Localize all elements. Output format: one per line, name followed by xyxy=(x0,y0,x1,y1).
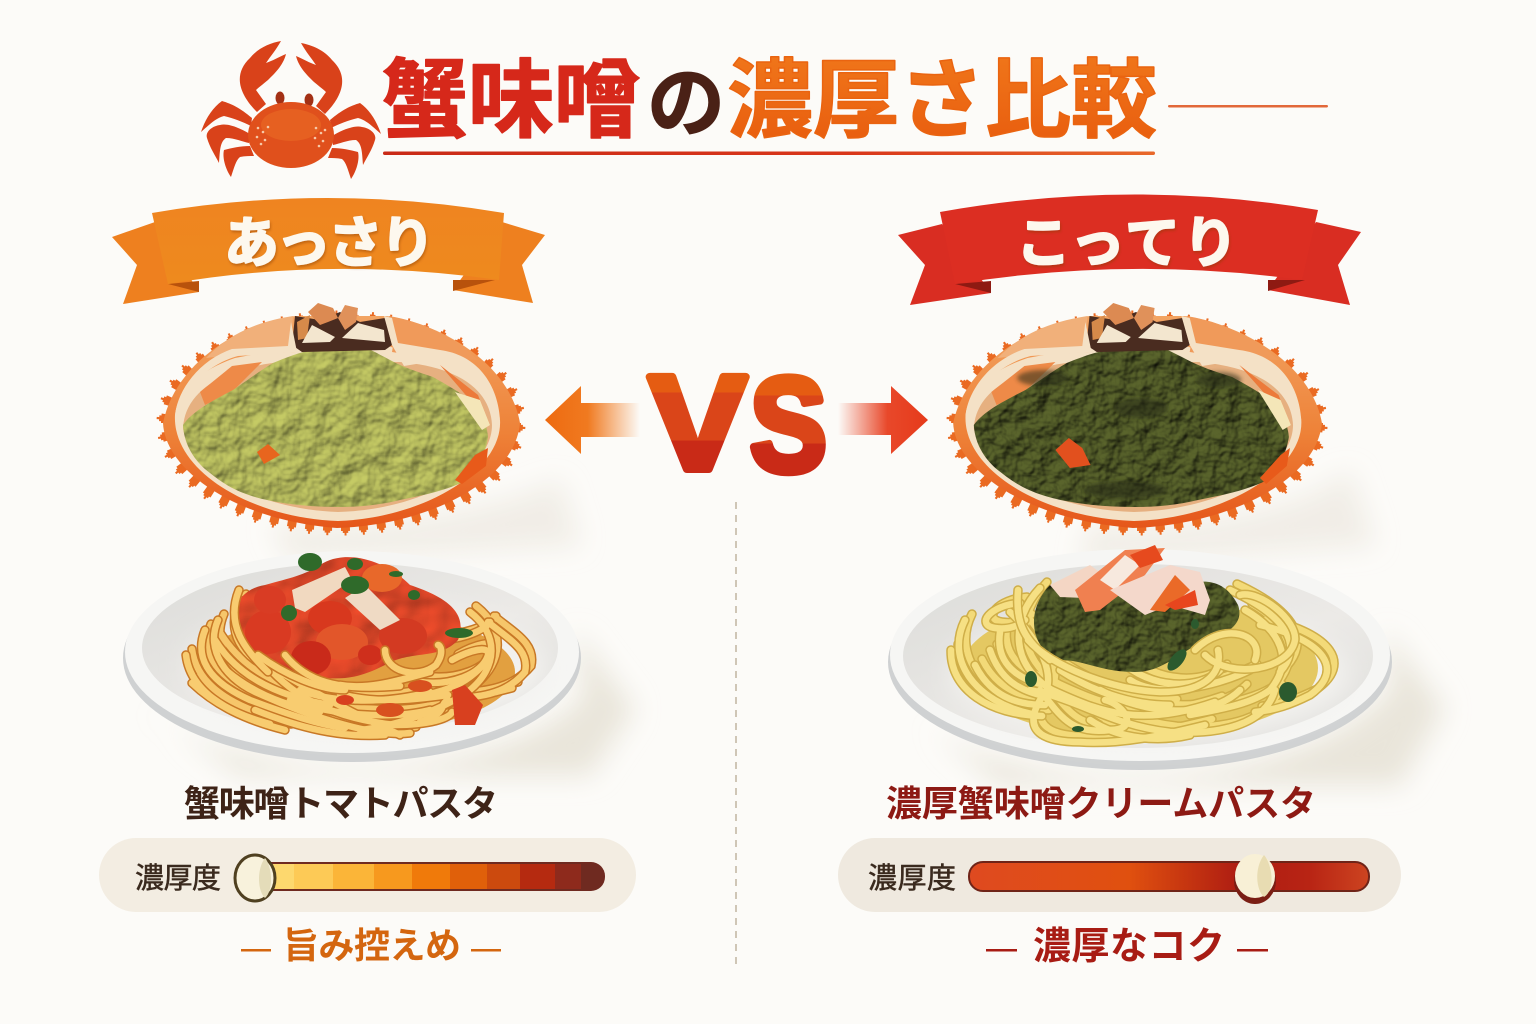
title: 濃厚さ比較: 濃厚さ比較 xyxy=(727,53,1157,149)
plate: cream pasta xyxy=(888,545,1392,770)
herbs xyxy=(1025,619,1297,732)
parsley xyxy=(281,553,473,638)
meter knob xyxy=(1234,854,1276,904)
dish name: cream: 濃厚蟹味噌クリームパスタ xyxy=(886,783,1316,824)
rich sauce xyxy=(1034,582,1239,672)
pasta base xyxy=(962,598,1318,738)
shadow washes xyxy=(920,470,1445,785)
front strands xyxy=(234,590,441,690)
meter bar xyxy=(969,862,1369,891)
front strands xyxy=(1017,590,1295,692)
pasta strands xyxy=(186,594,532,736)
meter bar xyxy=(254,862,605,891)
tomato sauce xyxy=(234,557,461,679)
ribbon label: こってり xyxy=(1016,212,1238,274)
dark miso xyxy=(974,340,1289,507)
pasta strands xyxy=(951,582,1334,743)
ribbon: あっさり xyxy=(112,198,545,304)
panel: light (あっさり) xyxy=(99,198,636,966)
richness meter: light xyxy=(99,838,636,912)
caption: light: 旨み控えめ xyxy=(283,925,461,966)
vs text xyxy=(649,348,827,500)
crab meat chunks xyxy=(292,567,352,612)
title underline xyxy=(383,152,1155,155)
arrow: right xyxy=(838,386,928,454)
richness meter: rich xyxy=(838,838,1401,912)
crab shell with light miso xyxy=(163,303,520,528)
title side line xyxy=(1168,105,1328,108)
dish name: tomato: 蟹味噌トマトパスタ xyxy=(184,783,498,824)
crab meat topping xyxy=(1050,545,1210,615)
panel: rich (こってり) xyxy=(838,194,1445,968)
light miso xyxy=(183,340,488,507)
title: の: の xyxy=(647,59,725,147)
centre divider xyxy=(735,502,737,970)
miso shadows xyxy=(1017,370,1241,499)
title: 蟹味噌: 蟹味噌 xyxy=(382,53,640,149)
plate: tomato pasta xyxy=(123,551,581,762)
arrow: left xyxy=(545,386,640,454)
pasta base xyxy=(195,612,515,732)
shadow washes xyxy=(150,480,635,775)
ribbon label: あっさり xyxy=(224,212,435,274)
vs text: S xyxy=(750,351,827,500)
meter label: 濃厚度 xyxy=(135,862,221,895)
ribbon: こってり xyxy=(898,194,1361,305)
meter label: 濃厚度 xyxy=(868,862,956,895)
vs badge with arrows xyxy=(545,348,928,500)
title block xyxy=(201,41,1328,179)
caption: rich: 濃厚なコク xyxy=(1033,926,1225,968)
icon: crab xyxy=(201,41,381,179)
vs text: V xyxy=(649,348,746,498)
crab shell with rich miso xyxy=(953,303,1322,528)
meter knob xyxy=(235,855,275,901)
tomato chunks xyxy=(245,564,483,725)
